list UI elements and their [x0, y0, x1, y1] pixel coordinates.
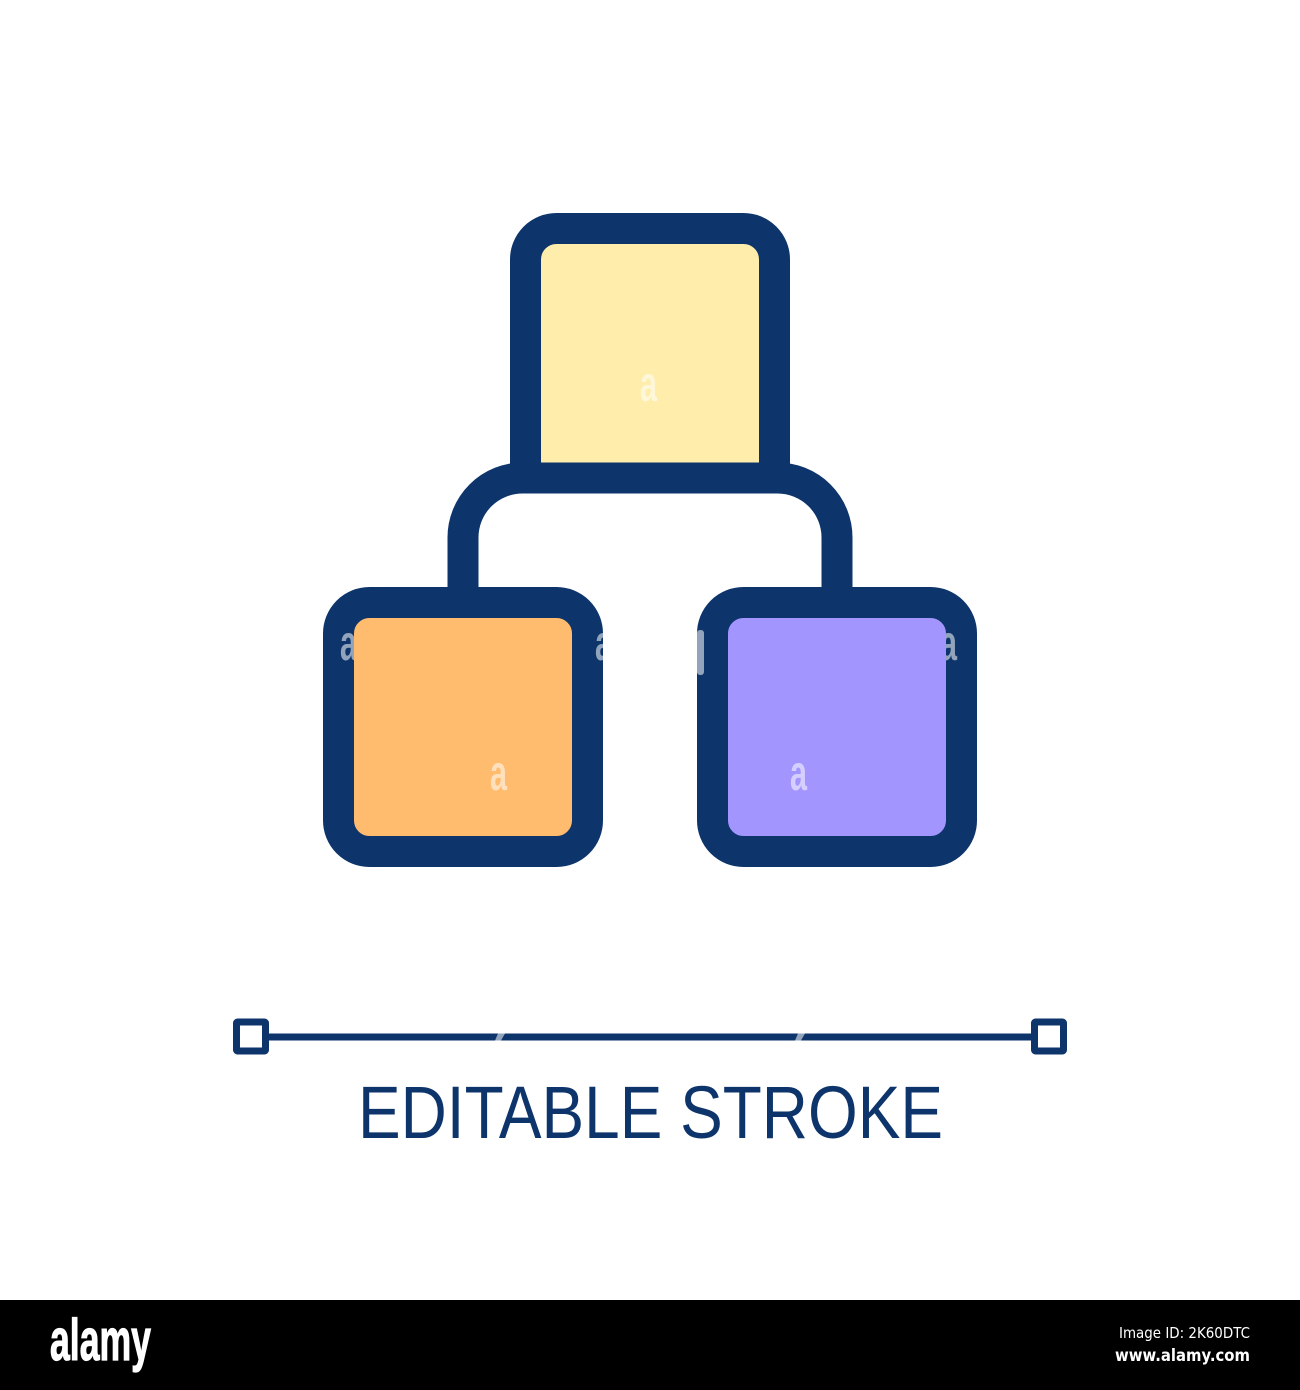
footer bar — [0, 1300, 1300, 1390]
alamy logo: alamy — [50, 1308, 151, 1373]
icon: hierarchy diagram — [338, 228, 962, 852]
right box: purple — [712, 602, 962, 852]
top box: yellow — [526, 228, 774, 478]
watermark marks: a — [340, 615, 358, 671]
image id: Image ID: 2K60DTC — [1119, 1324, 1250, 1342]
watermark marks — [340, 356, 958, 1040]
watermark marks: a — [940, 615, 958, 671]
editable stroke label: EDITABLE STROKE — [358, 1071, 943, 1154]
left handle — [236, 1022, 266, 1051]
left box: orange — [338, 602, 588, 852]
editable stroke line — [236, 1022, 1064, 1051]
connector between boxes — [463, 478, 837, 605]
watermark marks: a — [595, 615, 613, 671]
watermark marks: a — [490, 745, 508, 801]
watermark marks: a — [640, 356, 658, 412]
right handle — [1034, 1022, 1064, 1051]
watermark marks: a — [790, 745, 808, 801]
website: www.alamy.com — [1115, 1346, 1250, 1366]
